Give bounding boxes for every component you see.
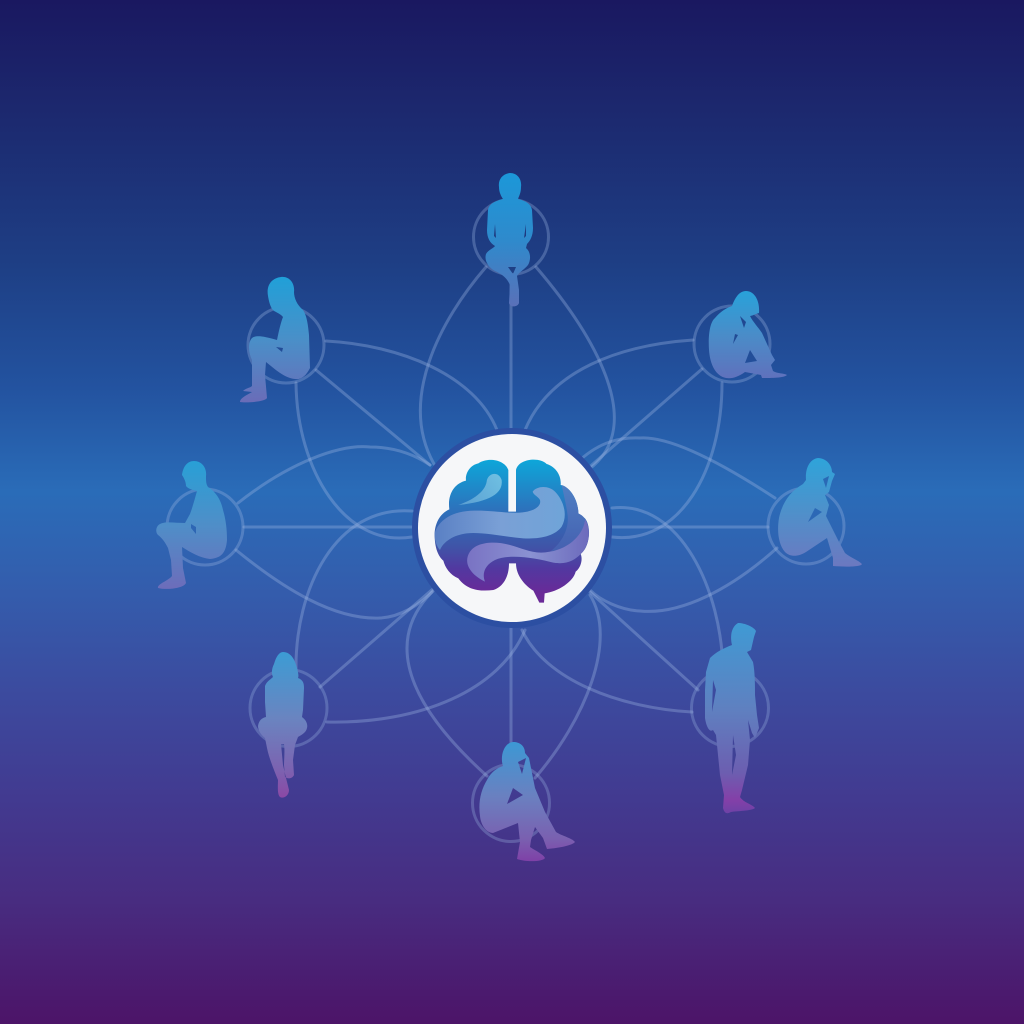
person: right, head in hands: [768, 458, 862, 567]
ring: upper left: [248, 307, 324, 383]
person: lower left, seated woman: [250, 652, 327, 798]
ring: bottom: [472, 764, 550, 842]
silhouette: lower left: [258, 652, 307, 798]
brain: upper left highlight: [458, 474, 502, 505]
person: upper left, seated in profile: [240, 277, 324, 402]
brain: base silhouette: [435, 460, 589, 603]
person: top, seated cross-legged: [474, 173, 548, 306]
badge ring: [412, 428, 612, 628]
silhouette: upper right: [709, 291, 787, 378]
person: lower right, standing man: [692, 623, 768, 813]
brain: upper light fold: [435, 487, 565, 550]
connection network: [236, 267, 777, 778]
ring: lower left: [250, 670, 327, 746]
ring: top: [474, 200, 548, 274]
central brain badge: [412, 428, 612, 628]
silhouette: upper left: [240, 277, 310, 402]
person: upper right, hugging knees: [694, 291, 787, 382]
ring: right: [768, 488, 844, 564]
person: bottom, head on hand: [472, 742, 575, 861]
ring: lower right: [692, 670, 768, 746]
person: left, seated in profile: [156, 461, 243, 589]
silhouette: left: [156, 461, 227, 589]
ring: left: [167, 489, 243, 565]
silhouette: right: [778, 458, 862, 567]
ring: upper right: [694, 306, 770, 382]
icon: brain: [435, 460, 589, 603]
brain: right side fold: [550, 485, 585, 552]
silhouette: bottom: [479, 742, 575, 861]
silhouette: lower right: [705, 623, 759, 813]
brain: lower light fold: [467, 519, 589, 582]
silhouette: top: [485, 173, 533, 306]
badge disc: [418, 434, 606, 622]
